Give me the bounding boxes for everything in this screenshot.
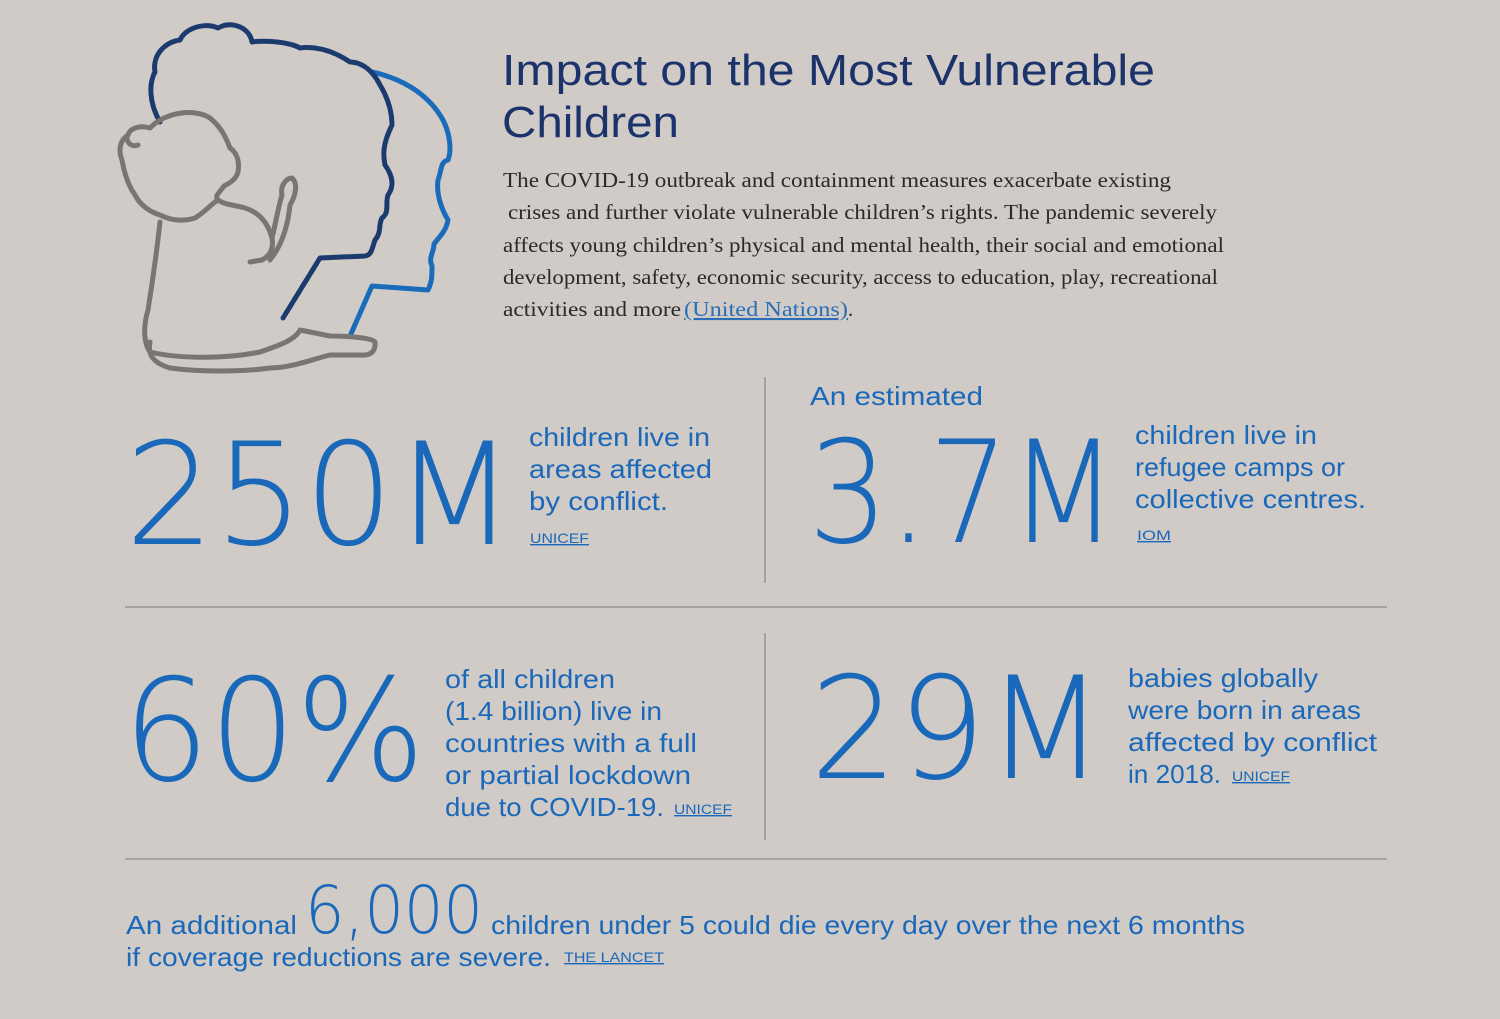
stat: 3.7M: collective centres. [1135,484,1366,514]
stat: 29M: babies globally [1128,663,1318,693]
stat: 60%: UNICEF [674,801,732,817]
stat: 60%: (1.4 billion) live in [445,696,662,726]
stat: 6,000: 6,000 [305,872,483,949]
stat: 3.7M [808,381,1366,576]
stat: 250M: children live in [529,422,710,452]
intro paragraph: . [848,297,853,321]
stat: 60%: due to COVID-19. [445,792,664,822]
title: Impact on the Most Vulnerable [502,46,1155,95]
stat: 6,000: if coverage reductions are severe. [126,942,551,972]
intro paragraph [503,168,1224,321]
stat: 60%: countries with a full [445,728,697,758]
intro paragraph: affects young children’s physical and mental health, their social and emotional [503,233,1224,257]
stat: 3.7M: 3.7M [808,411,1118,576]
stat: 29M: UNICEF [1232,768,1290,784]
stat: 29M [810,647,1378,812]
stat: 29M: 29M [810,647,1105,812]
stat: 250M: areas affected [529,454,712,484]
intro paragraph: The COVID-19 outbreak and containment measures exacerbate existing [503,168,1172,192]
intro paragraph: activities and more [503,297,681,321]
intro paragraph: development, safety, economic security, access to education, play, recreational [503,265,1218,289]
stat: 250M: 250M [125,413,515,578]
stat: 6,000: An additional [126,910,297,940]
stat: 3.7M: children live in [1135,420,1317,450]
stat: 250M [125,413,712,578]
stat: 60% [123,649,732,822]
stat: 3.7M: refugee camps or [1135,452,1345,482]
stat: 60%: 60% [123,649,425,814]
stat: 60%: of all children [445,664,615,694]
stat: 6,000 [126,872,1245,972]
stat: 250M: UNICEF [530,530,589,546]
stat: 29M: were born in areas [1127,695,1361,725]
intro paragraph: crises and further violate vulnerable children’s rights. The pandemic severely [508,200,1218,224]
stat: 3.7M: IOM [1137,527,1171,543]
stat: 29M: in 2018. [1128,759,1221,789]
stat: 6,000: THE LANCET [564,949,665,965]
stat: 250M: by conflict. [529,486,668,516]
stat: 6,000: children under 5 could die every day over the next 6 months [491,910,1245,940]
title [502,46,1155,147]
stat: 60%: or partial lockdown [445,760,691,790]
title: Children [502,98,679,147]
stat: 29M: affected by conflict [1128,727,1378,757]
stat: 3.7M: An estimated [810,381,983,411]
illustration: silhouettes of adult, child and baby [120,25,450,371]
intro paragraph: (United Nations) [684,297,848,321]
